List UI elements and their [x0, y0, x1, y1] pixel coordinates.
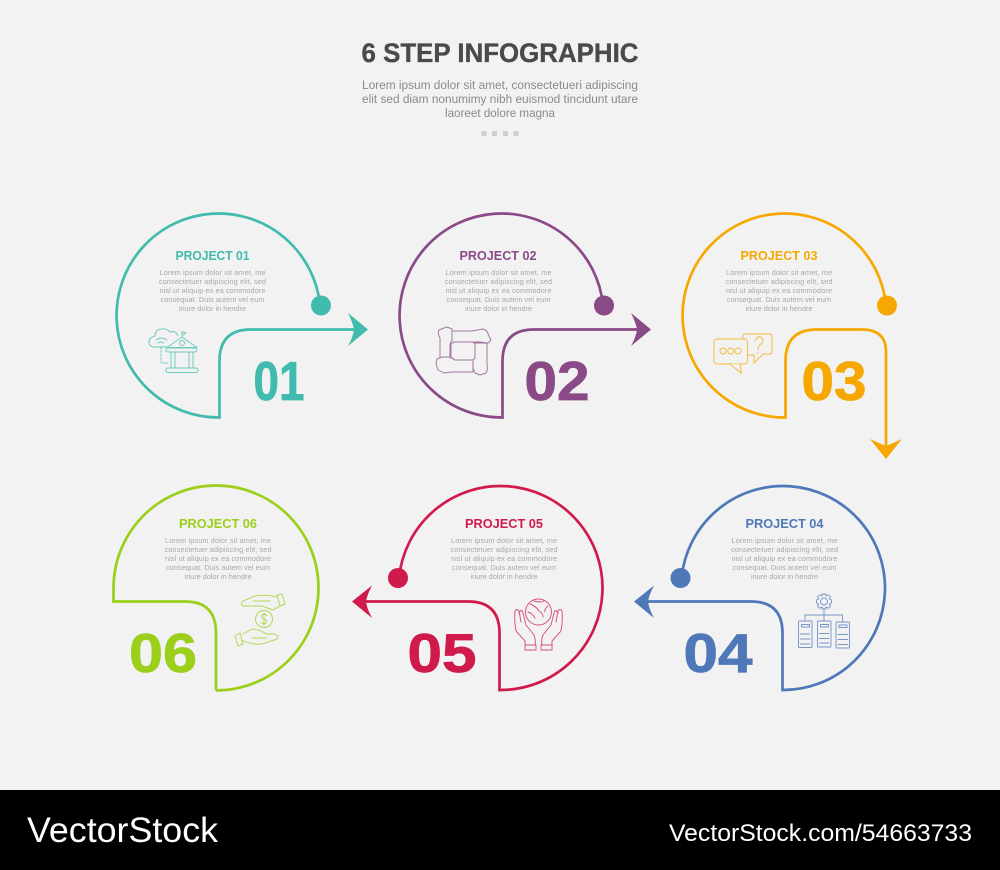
body text 06: nisl ut aliquip ex ea commodore: [165, 554, 271, 563]
icon: cloud and bank: [149, 329, 198, 372]
arrowhead 01: [348, 313, 368, 346]
footer logo text: VectorStock: [27, 811, 219, 850]
body text 03: Lorem ipsum dolor sit amet, me: [726, 268, 832, 277]
body text 06: consectetuer adipiscing elit, sed: [164, 545, 272, 554]
body text 06: iriure dolor in hendre: [184, 572, 252, 581]
body text 04: nisl ut aliquip ex ea commodore: [732, 554, 838, 563]
body text 03: [726, 268, 832, 313]
body text 06: consequat. Duis autem vel eum: [166, 563, 270, 572]
body text 02: iriure dolor in hendre: [465, 304, 532, 313]
node dot 01: [311, 296, 331, 316]
body text 06: Lorem ipsum dolor sit amet, me: [165, 536, 271, 545]
body text 06: [164, 536, 272, 581]
icon: gear and servers: [798, 594, 850, 648]
subtitle text: [362, 78, 638, 120]
heading 06: PROJECT 06: [179, 517, 257, 531]
panel: step 06: [114, 485, 318, 690]
title: 6 STEP INFOGRAPHIC: [362, 38, 638, 68]
icon: hands and coin: [235, 594, 285, 646]
number 04: 04: [684, 622, 753, 684]
number 01: 01: [254, 350, 304, 412]
node dot 02: [594, 296, 614, 316]
node dot 05: [388, 568, 408, 588]
footer band: [0, 790, 1000, 870]
node dot 04: [670, 568, 690, 588]
body text 01: iriure dolor in hendre: [179, 304, 246, 313]
subtitle text: elit sed diam nonumimy nibh euismod tincidunt utare: [362, 92, 638, 106]
icon: joined hands: [436, 327, 491, 375]
footer url text: VectorStock.com/54663733: [669, 820, 972, 847]
panel: step 04: [634, 486, 885, 690]
arrow path 06: [114, 485, 318, 690]
body text 05: Lorem ipsum dolor sit amet, me: [451, 536, 557, 545]
body text 03: iriure dolor in hendre: [746, 304, 812, 313]
arrow path 02: [400, 214, 641, 418]
body text 01: nisl ut aliquip ex ea commodore: [160, 286, 266, 295]
number 05: 05: [408, 622, 476, 684]
panel: step 03: [683, 214, 902, 459]
arrow path 04: [645, 486, 885, 690]
arrow path 01: [117, 214, 358, 418]
body text 03: consectetuer adipiscing elit, sed: [726, 277, 832, 286]
body text 02: nisl ut aliquip ex ea commodore: [446, 286, 552, 295]
heading 02: PROJECT 02: [460, 249, 537, 263]
body text 02: Lorem ipsum dolor sit amet, me: [446, 268, 552, 277]
arrowhead 02: [631, 313, 651, 346]
body text 05: iriure dolor in hendre: [470, 572, 538, 581]
body text 05: consequat. Duis autem vel eum: [452, 563, 556, 572]
body text 04: iriure dolor in hendre: [751, 572, 818, 581]
subtitle text: Lorem ipsum dolor sit amet, consectetueri adipiscing: [362, 78, 638, 92]
node dot 03: [877, 296, 897, 316]
body text 05: [450, 536, 558, 581]
panel: step 05: [352, 486, 603, 690]
body text 01: consequat. Duis autem vel eum: [160, 295, 264, 304]
icon: hands holding globe: [515, 599, 562, 650]
body text 05: nisl ut aliquip ex ea commodore: [451, 554, 557, 563]
title decoration dots: [482, 131, 518, 136]
body text 01: [159, 268, 266, 313]
body text 04: Lorem ipsum dolor sit amet, me: [732, 536, 838, 545]
panel: step 02: [400, 214, 651, 418]
number 06: 06: [129, 622, 197, 684]
icon: speech bubbles: [714, 334, 772, 374]
arrow path 05: [362, 486, 603, 690]
body text 03: nisl ut aliquip ex ea commodore: [726, 286, 832, 295]
panel: step 01: [117, 214, 368, 418]
body text 02: consectetuer adipiscing elit, sed: [445, 277, 552, 286]
heading 01: PROJECT 01: [176, 249, 250, 263]
heading 04: PROJECT 04: [746, 517, 824, 531]
number 03: 03: [802, 350, 866, 412]
body text 02: [445, 268, 552, 313]
arrowhead 04: [634, 586, 654, 618]
arrow path 03: [683, 214, 886, 449]
body text 05: consectetuer adipiscing elit, sed: [450, 545, 558, 554]
body text 01: Lorem ipsum dolor sit amet, me: [160, 268, 266, 277]
body text 04: consequat. Duis autem vel eum: [732, 563, 836, 572]
heading 05: PROJECT 05: [465, 517, 543, 531]
body text 03: consequat. Duis autem vel eum: [727, 295, 831, 304]
body text 04: consectetuer adipiscing elit, sed: [731, 545, 838, 554]
number 02: 02: [524, 350, 590, 412]
heading 03: PROJECT 03: [740, 249, 818, 263]
arrowhead 03: [870, 439, 902, 459]
arrowhead 05: [352, 586, 372, 618]
body text 02: consequat. Duis autem vel eum: [446, 295, 550, 304]
subtitle text: laoreet dolore magna: [445, 106, 555, 120]
body text 01: consectetuer adipiscing elit, sed: [159, 277, 266, 286]
body text 04: [731, 536, 838, 581]
